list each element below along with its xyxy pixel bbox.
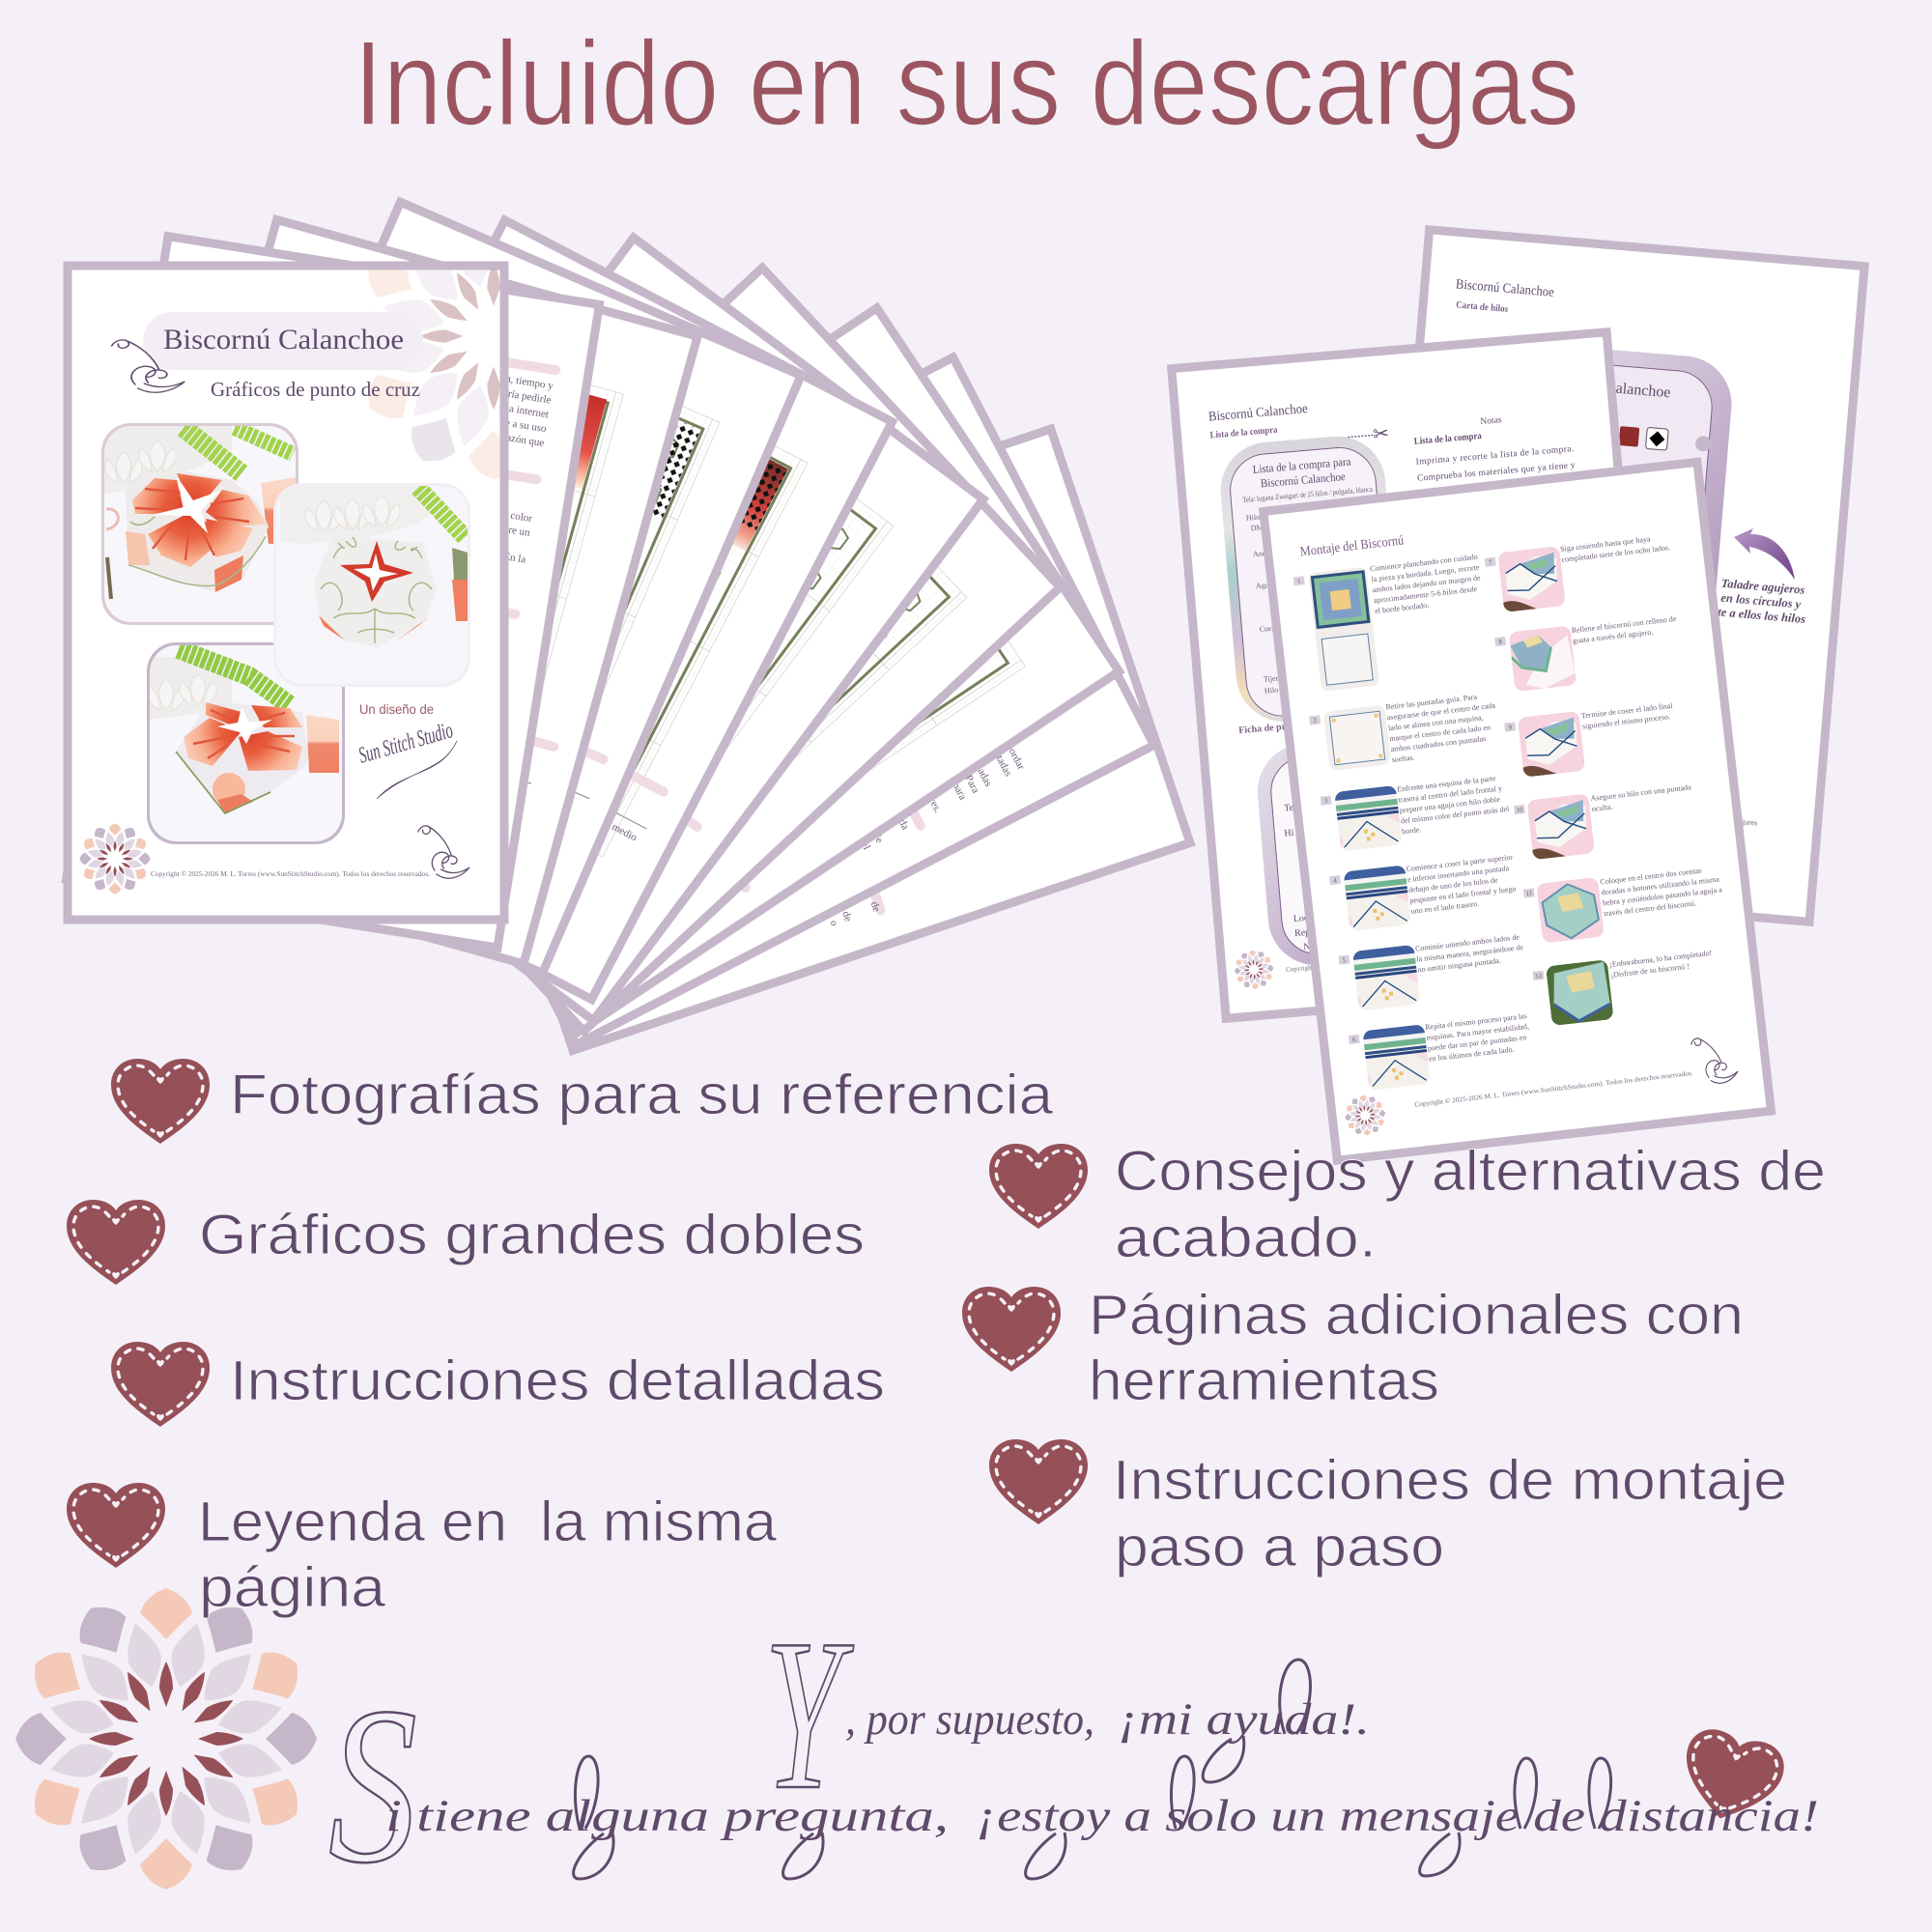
assembly heading: Montaje del Biscornú: [1299, 533, 1405, 559]
fan page 1: l: [485, 651, 490, 663]
shopping frame: Aguja: [1255, 580, 1275, 590]
step 8: guata a través del agujero.: [1573, 628, 1654, 645]
shopping subheading: Lista de la compra: [1209, 425, 1278, 441]
step 6: en los últimos de cada lado.: [1429, 1045, 1515, 1064]
step 5: la misma manera, asegurándose de: [1416, 943, 1524, 964]
step 10: 10: [1516, 806, 1523, 814]
cover signature: [355, 718, 457, 799]
step 1: 1: [1297, 578, 1301, 585]
right feature list: [962, 1140, 1826, 1578]
icon: scissors: ✂: [1372, 421, 1390, 445]
step 5: [1338, 932, 1529, 1012]
step 6: 6: [1352, 1036, 1357, 1044]
cover title: Biscornú Calanchoe: [163, 324, 404, 355]
shopping small mandala: [1233, 949, 1275, 991]
feature 3: Instrucciones detalladas: [230, 1350, 885, 1412]
step 12: ¡Disfrute de su biscornú !: [1610, 962, 1690, 980]
step 11: [1522, 863, 1726, 945]
photo: biscornu angled: [101, 423, 298, 625]
step 4: uno en el lado trasero.: [1410, 899, 1480, 916]
panel: thread chart page: [1375, 230, 1864, 922]
step 8: Rellene el biscornú con relleno de: [1571, 614, 1677, 635]
shopping frame: [1217, 433, 1405, 725]
step 3: [1320, 773, 1513, 853]
fan page 9: [434, 429, 1190, 1050]
step 4: [1329, 853, 1520, 933]
large mandala: [15, 1588, 317, 1889]
step 7: [1484, 532, 1675, 614]
feature 5: acabado.: [1115, 1207, 1377, 1269]
callout: drill instructions: Taladre agujeros: [1720, 577, 1805, 597]
icon: cover flourish: [112, 340, 185, 392]
icon: scissors: [1347, 421, 1390, 448]
thread chart note: en los lugares: [1715, 815, 1758, 827]
title: Incluido en sus descargas: [354, 17, 1579, 151]
feature 7: [1113, 1449, 1787, 1578]
fan page 9: o: [828, 919, 840, 928]
icon: heart 1: [111, 1059, 210, 1144]
step 1: Comience planchando con cuidado: [1370, 553, 1478, 573]
step 8: [1494, 613, 1683, 694]
fan page 2: [102, 219, 697, 964]
step 2: ambos cuadrados con puntadas: [1390, 734, 1487, 753]
step 2: marque el centro de cada lado en: [1389, 723, 1491, 743]
cover subtitle: Gráficos de punto de cruz: [211, 378, 420, 401]
closing line 2: S: [328, 1662, 417, 1910]
photo: biscornu from above: [273, 483, 470, 687]
step 1: [1293, 553, 1492, 694]
feature 5: [1115, 1140, 1826, 1269]
step 5: Continúe uniendo ambos lados de: [1415, 932, 1520, 953]
feature 7: paso a paso: [1115, 1516, 1444, 1578]
step 6: [1348, 1011, 1534, 1093]
production sheet label: Ficha de producción: [1238, 719, 1323, 736]
fan page 4: medio: [610, 821, 639, 844]
panel: shopping list page: [1172, 332, 1662, 1018]
fan page 1: r a internet: [502, 402, 550, 420]
shopping frame: Tela: lugana Zweigart de 25 hilos / pulgada, blanca: [1242, 485, 1374, 504]
step 7: 7: [1489, 558, 1492, 566]
cover small mandala: [79, 823, 151, 895]
step 11: doradas o botones utilizando la misma: [1601, 875, 1720, 896]
feature 5: Consejos y alternativas de: [1115, 1140, 1826, 1203]
fan page 5: medio: [582, 860, 611, 885]
fan page 6: [286, 268, 1060, 1031]
step 9: [1504, 700, 1680, 779]
step 1: el borde bordado.: [1375, 601, 1430, 615]
cover copyright: Copyright © 2025-2026 M. L. Torres (www.SunStitchStudio.com). Todos los derechos reservados.: [151, 869, 430, 878]
step 2: [1309, 691, 1501, 773]
fan page 3: [142, 202, 801, 973]
icon: cover swirl: [418, 826, 469, 878]
shopping frame: Cuentas: [1259, 623, 1285, 634]
callout: drill instructions: [1712, 576, 1808, 626]
step 10: oculta.: [1591, 803, 1613, 813]
fan page 8: madas: [972, 759, 994, 788]
step 9: 9: [1508, 724, 1513, 731]
feature 7: Instrucciones de montaje: [1113, 1449, 1787, 1512]
step 2: 2: [1313, 717, 1318, 724]
step 11: hebra y cosiéndolos pasando la aguja a: [1602, 885, 1723, 907]
cover signature: Sun Stitch Studio: [355, 718, 456, 769]
notes body: Imprima y recorte la lista de la compra.: [1415, 444, 1575, 468]
step 1: ambos lados dejando un margen de: [1372, 574, 1481, 594]
fan page 7: [335, 308, 1119, 1033]
step 4: e inferior insertando una puntada: [1406, 864, 1510, 884]
production sheet frame: Te: [1284, 803, 1294, 813]
fan page 8: nda: [894, 812, 911, 832]
shopping frame: Lista de la compra para: [1252, 454, 1352, 476]
assembly bar: [1404, 512, 1671, 542]
step 11: 11: [1525, 890, 1533, 897]
step 10: [1514, 781, 1697, 862]
fan page 1: s: [486, 636, 492, 648]
production sheet frame: Rep: [1294, 927, 1311, 939]
thread chart subheading: Carta de hilos: [1456, 299, 1509, 315]
step 4: pespunte en el lado frontal y luego: [1409, 884, 1517, 905]
assembly copyright: Copyright © 2025-2026 M. L. Torres (www.SunStitchStudio.com). Todos los derechos reservados.: [1414, 1069, 1693, 1109]
icon: heart 6: [962, 1287, 1061, 1372]
thread chart swirl: [1695, 856, 1731, 900]
closing line 1: Y: [764, 1595, 854, 1834]
step 2: lado se alinea con una esquina,: [1388, 713, 1484, 732]
fan page 1: En la: [503, 551, 526, 566]
step 12: [1532, 948, 1719, 1028]
fan page 9: de: [839, 910, 854, 923]
closing line 2: i tiene alguna pregunta,: [385, 1791, 949, 1841]
left feature list: [67, 1059, 1054, 1619]
fan page 1: n color: [501, 508, 533, 525]
step 11: través del centro del biscornú.: [1604, 898, 1696, 918]
production sheet frame: Hi: [1284, 828, 1294, 839]
feature 4: [198, 1491, 778, 1619]
fan page 8: de: [870, 831, 886, 845]
step 8: 8: [1498, 638, 1503, 646]
thread chart bar: [1516, 313, 1823, 338]
cover pale mandala: [369, 270, 500, 479]
feature 1: Fotografías para su referencia: [230, 1064, 1054, 1126]
step 3: trasera al centro del lado frontal y: [1398, 783, 1502, 805]
fan page 1: te a su uso: [501, 416, 548, 435]
feature 4: Leyenda en la misma: [198, 1491, 778, 1553]
icon: heart 4: [67, 1483, 165, 1568]
notes body: Lista de la compra: [1413, 431, 1482, 447]
fan page 8: . Para: [960, 768, 981, 795]
shopping frame: Tijeras: [1264, 673, 1285, 684]
fan page 8: , para: [948, 776, 969, 802]
thread chart frame: Biscornú Calanchoe: [1546, 375, 1671, 401]
fan page 8: res.: [926, 796, 944, 815]
shopping bar: [1279, 404, 1579, 430]
notes body: Comprueba los materiales que ya tiene y: [1417, 461, 1576, 484]
feature 6: herramientas: [1089, 1350, 1439, 1412]
thread chart heading: Biscornú Calanchoe: [1455, 277, 1554, 300]
closing line 2: ¡estoy a solo un mensaje de distancia!: [976, 1791, 1819, 1841]
panel: cover page: [64, 261, 508, 923]
step 9: Termine de coser el lado final: [1580, 701, 1674, 721]
fan page 1: re un: [508, 525, 531, 539]
production sheet frame: [1254, 732, 1455, 969]
closing line 1: ¡mi ayuda!.: [1118, 1694, 1370, 1745]
fan page 1: razón que: [502, 431, 545, 449]
step 10: Asegure su hilo con una puntada: [1590, 782, 1692, 803]
fan page 1: ón, tiempo y: [499, 372, 554, 392]
step 3: del mismo color del punto atrás del: [1401, 805, 1510, 825]
arrow: curved purple: [1734, 528, 1795, 580]
step 3: 3: [1323, 797, 1328, 805]
step 7: Siga cosiendo hasta que haya: [1560, 534, 1651, 554]
icon: heart 7: [989, 1439, 1088, 1524]
cover title: [143, 312, 423, 370]
icon: heart 3: [111, 1342, 210, 1427]
production sheet frame: Loc: [1293, 913, 1309, 924]
feature 6: Páginas adicionales con: [1089, 1284, 1744, 1347]
production sheet frame: No: [1303, 941, 1316, 952]
closing line 1: , por supuesto,: [845, 1694, 1094, 1745]
step 9: siguiendo el mismo proceso.: [1582, 712, 1671, 731]
fan page 8: el: [859, 839, 872, 852]
step 6: Repita el mismo proceso para las: [1425, 1011, 1527, 1032]
shopping frame: Hilos:: [1246, 512, 1265, 523]
shopping heading: Biscornú Calanchoe: [1208, 402, 1308, 425]
fan page 1: ía: [485, 621, 495, 634]
closing heart: [1672, 1723, 1790, 1832]
closing line 1: [764, 1595, 1370, 1834]
feature 2: Gráficos grandes dobles: [199, 1204, 865, 1266]
step 6: esquinas. Para mayor estabilidad,: [1426, 1022, 1529, 1042]
step 4: debajo de uno de los hilos de: [1408, 875, 1498, 895]
fan page 9: de: [868, 900, 882, 914]
step 7: completado siete de los ocho lados.: [1561, 543, 1671, 564]
feature 6: [1089, 1284, 1744, 1412]
photo: biscornu low angle: [147, 642, 345, 844]
step 6: puede dar un par de puntadas en: [1427, 1033, 1527, 1053]
feature 4: página: [199, 1556, 386, 1619]
callout: drill instructions: ate a ellos los hilos: [1712, 605, 1806, 626]
icon: heart 5: [989, 1144, 1088, 1229]
notes body: [1413, 423, 1576, 484]
cover byline: Un diseño de: [359, 701, 434, 717]
assembly swirl: [1690, 1035, 1739, 1086]
step 2: sueltas.: [1391, 753, 1415, 764]
fan page 8: puntadas: [986, 740, 1014, 779]
step 11: Coloque en el centro dos cuentas: [1600, 867, 1702, 886]
thread chart frame: [1469, 341, 1735, 764]
step 12: ¡Enhorabuena, lo ha completado!: [1609, 949, 1713, 969]
step 2: asegurarse de que el centro de cada: [1386, 701, 1496, 722]
fan page 8: [375, 357, 1154, 1044]
step 2: Retire las puntadas guía. Para: [1385, 693, 1478, 711]
step 3: borde.: [1402, 825, 1422, 836]
panel: assembly instructions page: [1264, 462, 1771, 1160]
step 3: prepare una aguja con hilo doble: [1399, 795, 1501, 815]
shopping frame: Ancho: [1253, 548, 1274, 558]
fan of chart pages: [67, 202, 1190, 1050]
shopping copyright: Copyright © 2025-2026: [1286, 960, 1351, 974]
closing line 2: [328, 1662, 1819, 1910]
step 3: Enfrente una esquina de la parte: [1397, 774, 1496, 794]
callout: drill instructions: en los círculos y: [1720, 591, 1802, 611]
shopping frame: Biscornú Calanchoe: [1260, 469, 1346, 490]
step 4: Comience a coser la parte superior: [1406, 853, 1514, 873]
step 4: 4: [1333, 876, 1338, 885]
fan page 1: aría pedirle: [502, 387, 552, 407]
fan page 1: [67, 237, 599, 948]
step 12: 12: [1535, 972, 1543, 980]
shopping frame: DMC: [1250, 523, 1268, 532]
step 5: 5: [1342, 956, 1347, 964]
fan page 8: de bordar: [998, 730, 1027, 772]
fan page 5: [243, 238, 983, 1020]
shopping frame: Hilo de: [1264, 685, 1288, 696]
step 5: no omitir ninguna puntada.: [1417, 956, 1501, 974]
notes heading: Notas: [1480, 415, 1502, 427]
icon: heart 2: [67, 1200, 165, 1285]
assembly small mandala: [1343, 1093, 1388, 1138]
step 1: la pieza ya bordada. Luego, recorte: [1371, 563, 1480, 583]
fan page 4: [204, 220, 893, 1000]
step 1: aproximadamente 5-6 hilos desde: [1373, 584, 1478, 605]
